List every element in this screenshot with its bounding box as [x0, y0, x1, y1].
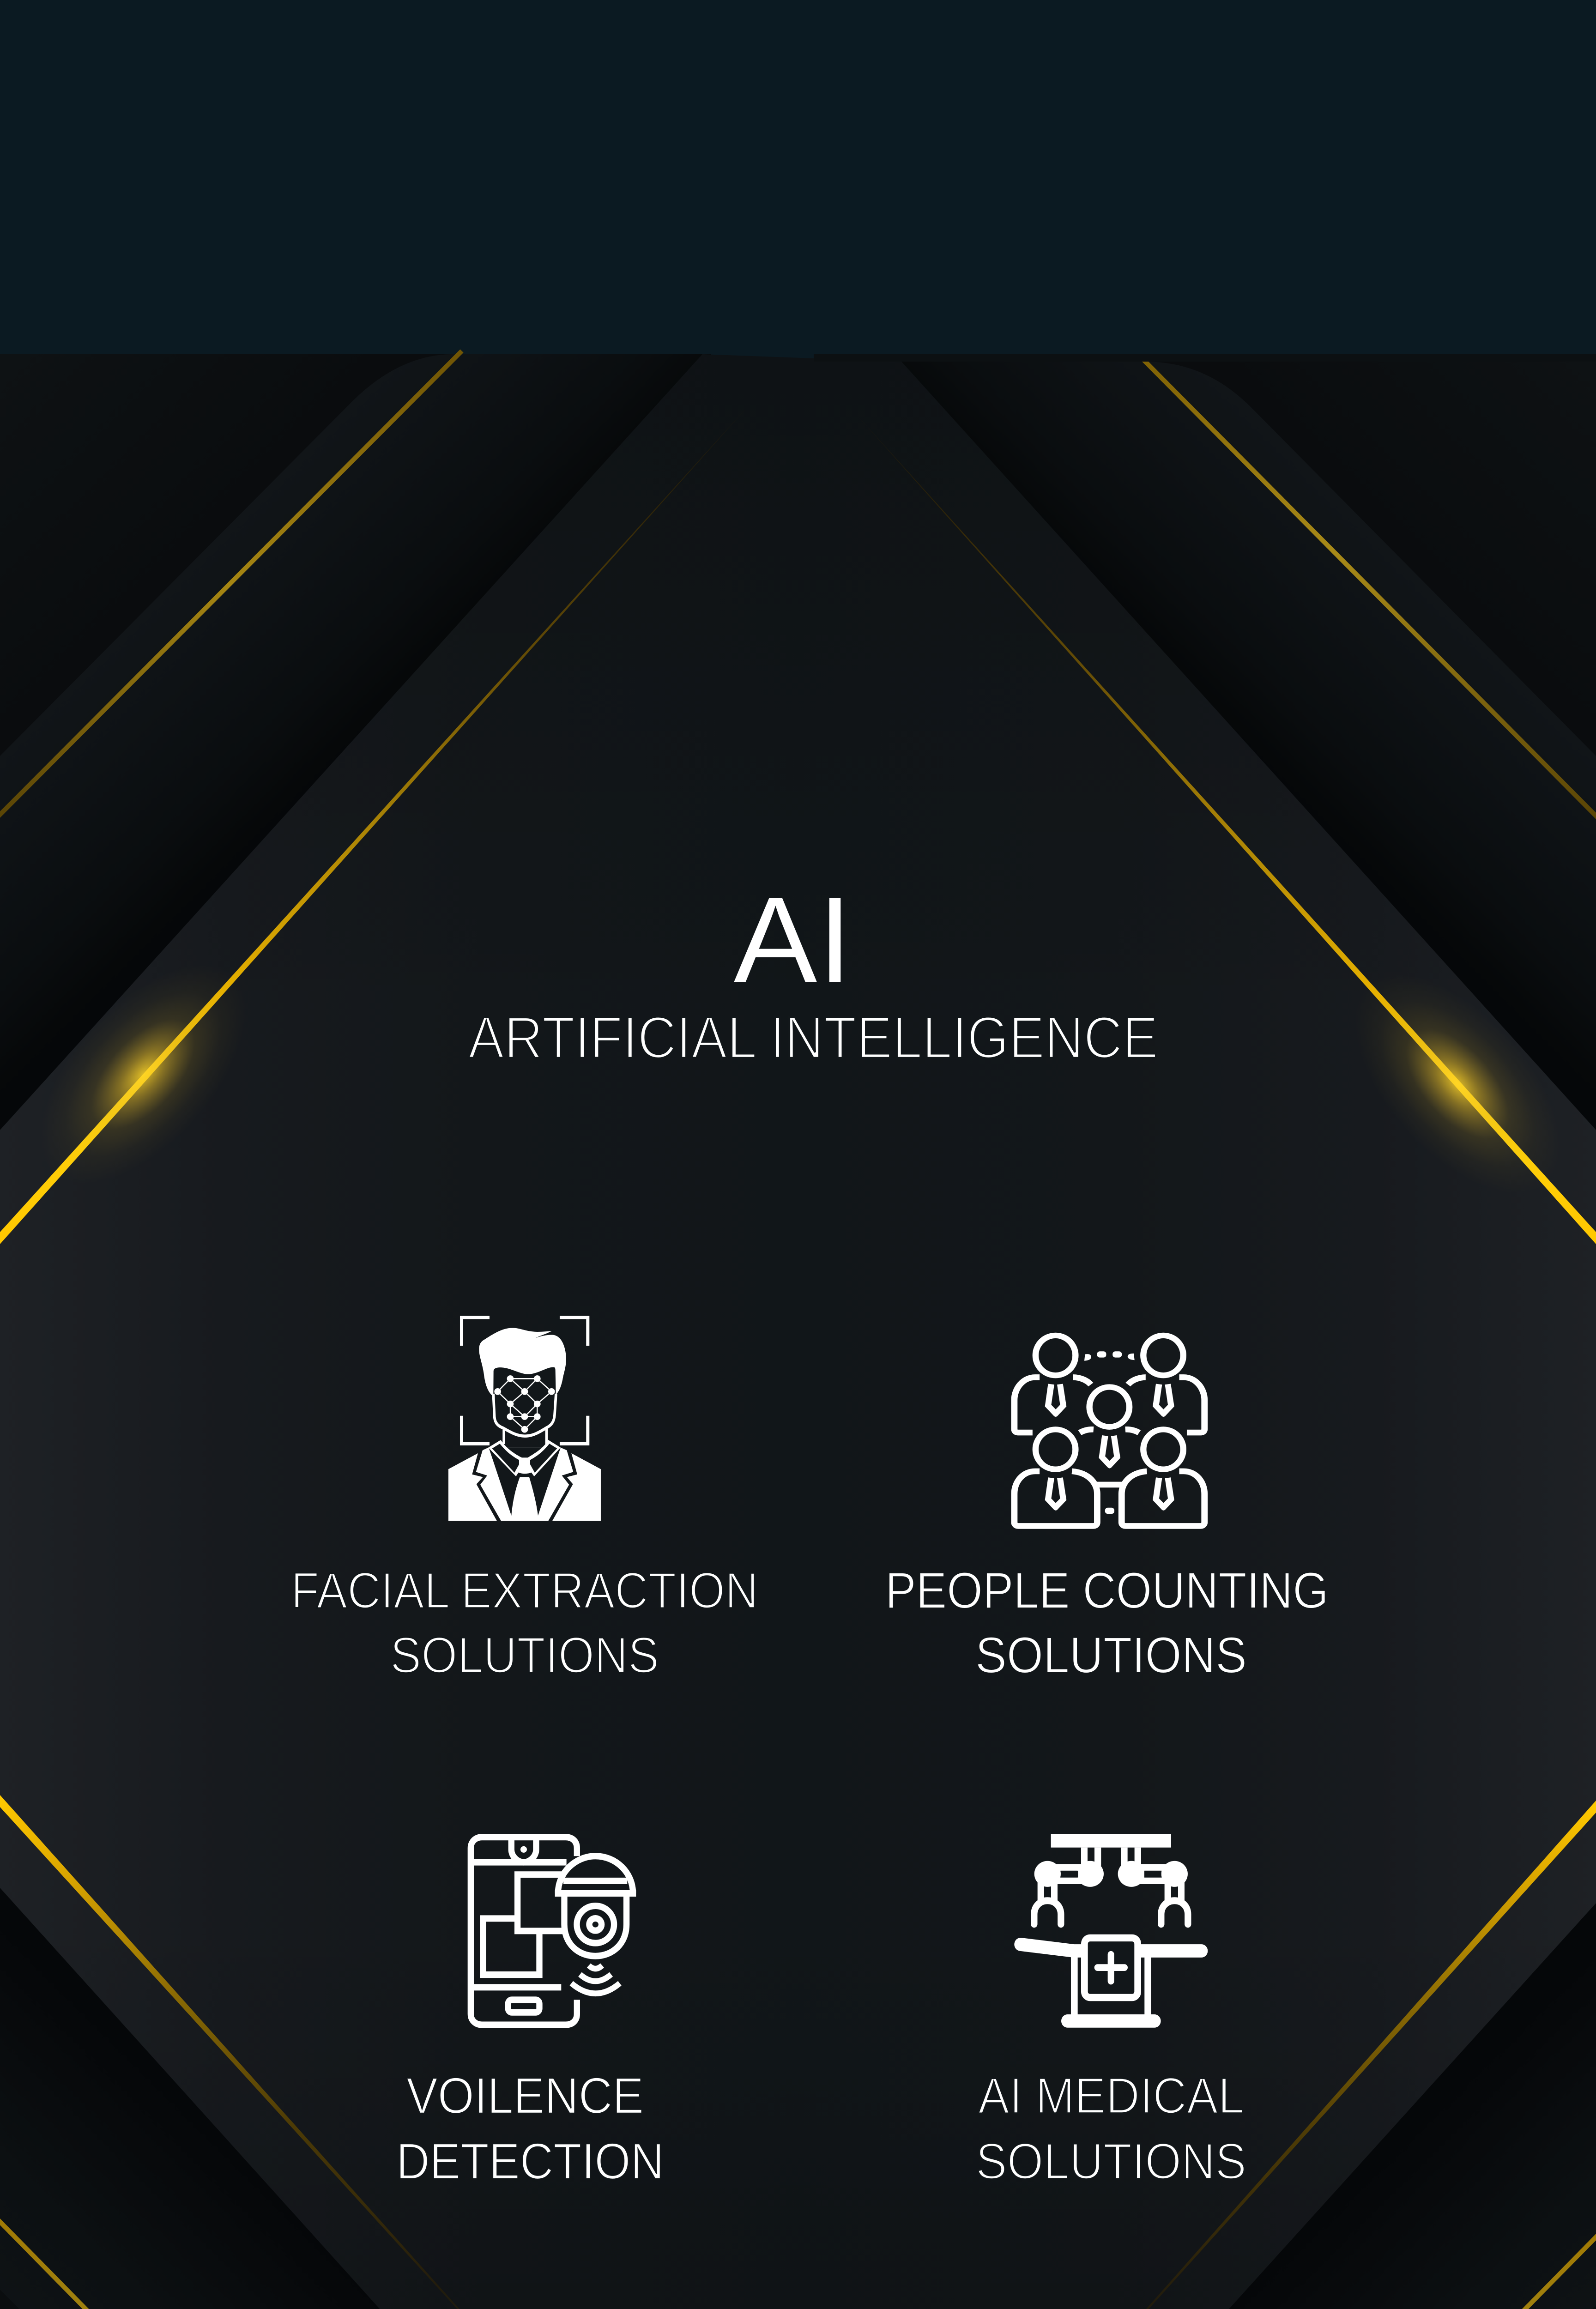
corner bottom-right — [1131, 2286, 1596, 2309]
grippers — [1034, 1901, 1188, 1924]
icon: AI medical robot — [1021, 1834, 1202, 2021]
subtitle: ARTIFICIAL INTELLIGENCE — [468, 1005, 1158, 1071]
collar cutouts — [492, 1444, 557, 1473]
top band — [0, 0, 1596, 355]
label: violence detection: VOILENCE — [406, 2067, 644, 2124]
table legs — [1071, 1955, 1151, 2017]
jacket left — [448, 1453, 497, 1521]
front bodies — [1014, 1471, 1097, 1526]
corner top-left — [0, 354, 462, 785]
joint gaps — [1044, 1871, 1178, 1898]
glow left — [2, 928, 284, 1220]
label: facial extraction: FACIAL EXTRACTION — [291, 1562, 758, 1619]
table line — [1096, 1476, 1123, 1493]
jacket right — [552, 1453, 601, 1521]
jacket lapels — [476, 1448, 573, 1521]
strip bottom-left — [0, 1888, 757, 2309]
ceiling bar — [1051, 1834, 1171, 1848]
label: people counting: PEOPLE COUNTING — [885, 1562, 1329, 1619]
ties — [1045, 1384, 1174, 1511]
gold line inner top-left — [0, 404, 750, 1244]
face — [493, 1367, 556, 1436]
camera lens — [577, 1906, 614, 1943]
label: facial extraction: SOLUTIONS — [390, 1627, 659, 1684]
arms — [1047, 1864, 1174, 1884]
strip bottom-right — [850, 1903, 1596, 2309]
shoulders — [1014, 1377, 1040, 1433]
gold line inner bottom-right — [1007, 1801, 1596, 2309]
signal waves — [571, 1965, 620, 1994]
posts — [1081, 1848, 1141, 1866]
top band right strip — [814, 354, 1596, 362]
hair — [479, 1328, 566, 1396]
home button — [508, 2000, 539, 2013]
face mesh nodes — [494, 1375, 555, 1433]
title: AI — [733, 871, 852, 1009]
corner top-right — [1131, 354, 1596, 785]
icon: violence detection camera — [471, 1837, 636, 2025]
face mesh — [498, 1378, 551, 1429]
gold line outer top-left — [0, 351, 462, 818]
label: facial extraction — [291, 1562, 758, 1684]
wrists — [1038, 1882, 1185, 1903]
camera body — [564, 1897, 627, 1956]
label: people counting: SOLUTIONS — [975, 1627, 1247, 1684]
icon: people counting — [1014, 1336, 1204, 1526]
joints — [1076, 1861, 1104, 1887]
table slab — [1021, 1944, 1202, 2021]
glow right — [1316, 938, 1596, 1230]
gold line inner bottom-left — [0, 1795, 583, 2309]
medical cross — [1098, 1954, 1124, 1981]
neck — [502, 1427, 548, 1444]
gold line outer bottom-right — [1141, 2233, 1596, 2309]
medical box — [1084, 1938, 1138, 1998]
gold line inner top-right — [855, 413, 1596, 1244]
heads — [1035, 1336, 1183, 1469]
label: AI medical: SOLUTIONS — [976, 2133, 1246, 2190]
phone notch — [511, 1837, 536, 1862]
camera dome — [558, 1856, 633, 1893]
label: AI medical — [976, 2067, 1246, 2190]
label: violence detection: DETECTION — [396, 2133, 664, 2190]
gold line outer top-right — [1142, 358, 1596, 820]
dots and table leg — [1084, 1351, 1135, 1514]
label: people counting — [885, 1562, 1329, 1684]
collar — [488, 1440, 561, 1476]
shirt — [489, 1448, 561, 1516]
face outline — [493, 1394, 556, 1436]
corner bottom-left — [0, 2263, 462, 2309]
phone bars — [471, 1862, 567, 1987]
icon: facial recognition — [448, 1316, 601, 1521]
gold line outer bottom-left — [0, 2218, 462, 2309]
label: violence detection — [396, 2067, 664, 2190]
scan brackets — [460, 1316, 589, 1445]
strip top-left — [0, 354, 711, 1130]
label: AI medical: AI MEDICAL — [978, 2067, 1244, 2124]
strip top-right — [896, 362, 1596, 1130]
phone body — [471, 1837, 577, 2025]
map squares — [483, 1874, 564, 1975]
phone lens — [520, 1846, 527, 1853]
